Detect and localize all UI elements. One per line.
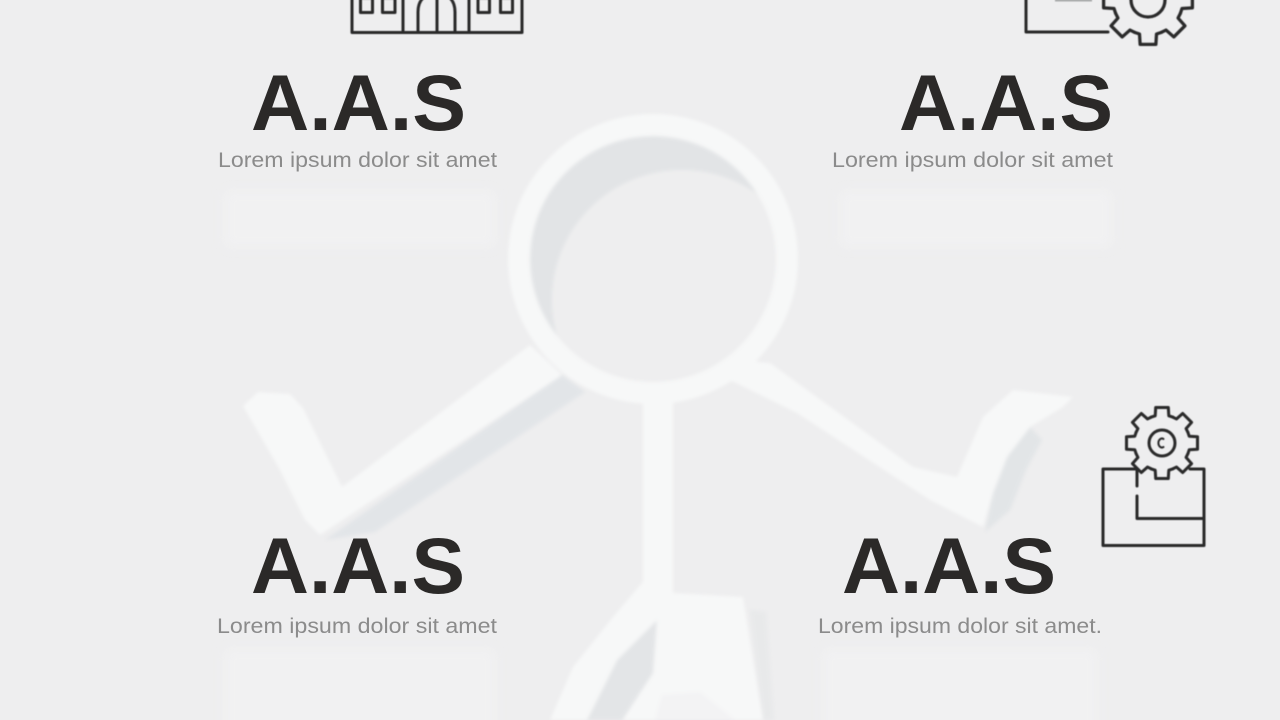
- subheading: Lorem ipsum dolor sit amet: [218, 149, 497, 172]
- figure shadow: left arm: [325, 375, 585, 540]
- box outline: [1026, 0, 1108, 32]
- figure: head ring: [519, 125, 787, 393]
- box label: [1055, 0, 1092, 2]
- heading: A.A.S: [899, 58, 1113, 147]
- text placeholder: [822, 648, 1098, 720]
- heading: A.A.S: [251, 58, 466, 147]
- figure: head interior: [532, 138, 750, 326]
- figure shadow: left leg: [587, 620, 657, 720]
- heading: A.A.S: [251, 521, 465, 610]
- subheading: Lorem ipsum dolor sit amet: [217, 615, 497, 638]
- text placeholder: [224, 190, 496, 248]
- figure: right arm and hand: [730, 360, 1073, 527]
- panel: bottom left: [217, 521, 497, 720]
- stick figure: [243, 125, 1073, 720]
- figure: gap between legs: [655, 692, 735, 720]
- head shadow: [532, 138, 750, 326]
- box outline: [1103, 469, 1204, 546]
- figure: torso: [643, 385, 673, 600]
- head lit area: [553, 171, 774, 380]
- figure: right leg: [623, 593, 763, 720]
- figure shadow: right leg: [750, 610, 774, 720]
- icon: box with gear, top right: [1026, 0, 1192, 44]
- infographic canvas: [218, 0, 1206, 718]
- box inner fold: [1137, 469, 1204, 518]
- heading: A.A.S: [842, 521, 1056, 610]
- panel: top right: [832, 58, 1113, 248]
- gear: [1126, 408, 1198, 478]
- text placeholder: [224, 648, 496, 720]
- panel: bottom right: [818, 521, 1102, 720]
- figure: left arm and hand: [243, 345, 562, 535]
- text placeholder: [839, 190, 1113, 248]
- icon: box with gear, bottom right: [1103, 408, 1204, 546]
- figure shadow: right hand: [985, 427, 1042, 532]
- gear: [1104, 0, 1192, 44]
- subheading: Lorem ipsum dolor sit amet.: [818, 615, 1102, 638]
- subheading: Lorem ipsum dolor sit amet: [832, 149, 1113, 172]
- figure: left leg: [550, 575, 673, 720]
- icon: building: [352, 0, 522, 32]
- panel: top left: [218, 58, 497, 248]
